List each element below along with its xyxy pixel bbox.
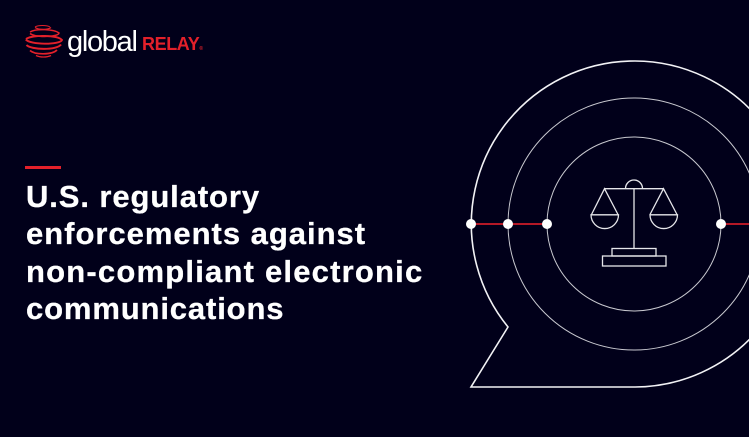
title line 3: non-compliant electronic bbox=[26, 254, 423, 289]
logo wordmark: global: global bbox=[67, 26, 137, 58]
red accent bar bbox=[25, 166, 61, 169]
speech bubble outline bbox=[471, 61, 749, 387]
red connector lines bbox=[471, 223, 749, 225]
title line 2: enforcements against bbox=[26, 216, 366, 251]
icon: red striped globe bbox=[25, 25, 64, 58]
title line 1: U.S. regulatory bbox=[26, 179, 260, 214]
logo wordmark: RELAY: RELAY® bbox=[142, 34, 203, 54]
inner circle bbox=[547, 137, 721, 311]
connector dots bbox=[466, 219, 726, 229]
middle circle bbox=[508, 98, 749, 350]
title line 4: communications bbox=[26, 291, 284, 326]
icon: scales of justice bbox=[591, 180, 678, 266]
title bbox=[26, 179, 423, 326]
logo: Global Relay bbox=[25, 25, 203, 58]
